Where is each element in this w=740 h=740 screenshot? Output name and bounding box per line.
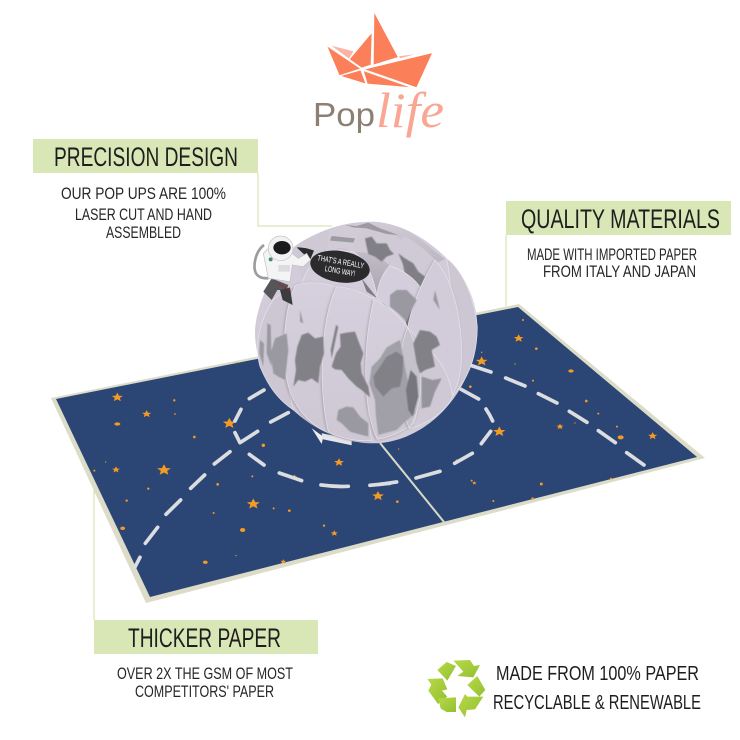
text: precision design description: ASSEMBLED (106, 224, 181, 242)
astronaut speech bubble: LONG WAY! (324, 264, 356, 278)
text: thicker paper description: OVER 2X THE GSM OF MOST (117, 665, 293, 683)
pop-up card (51, 304, 705, 603)
text: precision design description: OUR POP UPS ARE 100% (61, 185, 226, 203)
card base (51, 304, 705, 603)
card fold line (380, 443, 444, 522)
logo: Poplife (313, 12, 444, 138)
pop-up moon (255, 222, 477, 445)
text: made from 100% paper (493, 662, 701, 714)
text: thicker paper description (117, 665, 293, 701)
connector lines (94, 173, 506, 620)
heading: thicker paper (94, 620, 318, 654)
moon base tabs (312, 428, 352, 445)
moon silhouette (255, 222, 477, 443)
wordmark: Pop: Pop (313, 96, 375, 133)
card navy surface (56, 307, 697, 597)
heading: precision design (33, 139, 258, 173)
moon front petals (258, 283, 453, 441)
icon: origami paper boat (327, 12, 433, 88)
astronaut speech bubble: THAT'S A REALLY (317, 253, 365, 270)
wordmark: life: life (376, 82, 444, 138)
text: precision design description (61, 185, 226, 242)
heading: precision design: PRECISION DESIGN (54, 142, 238, 172)
left stars and path (93, 362, 390, 568)
icon: recycling arrows (427, 660, 485, 717)
astronaut speech bubble (297, 246, 372, 287)
panel: recyclable (427, 660, 701, 717)
panel: quality materials (506, 201, 731, 281)
icon: astronaut (255, 236, 311, 305)
heading: thicker paper: THICKER PAPER (128, 623, 281, 653)
text: quality materials description (527, 246, 697, 281)
text: quality materials description: FROM ITALY AND JAPAN (543, 263, 696, 281)
right stars and path (380, 319, 657, 503)
text: thicker paper description: COMPETITORS' PAPER (135, 683, 274, 701)
panel: thicker paper (94, 620, 318, 701)
text: precision design description: LASER CUT AND HAND (75, 206, 212, 224)
panel: precision design (33, 139, 258, 242)
moon middle petals (302, 251, 477, 397)
moon interior cells (293, 222, 445, 327)
moon dark maria patches (259, 290, 442, 437)
